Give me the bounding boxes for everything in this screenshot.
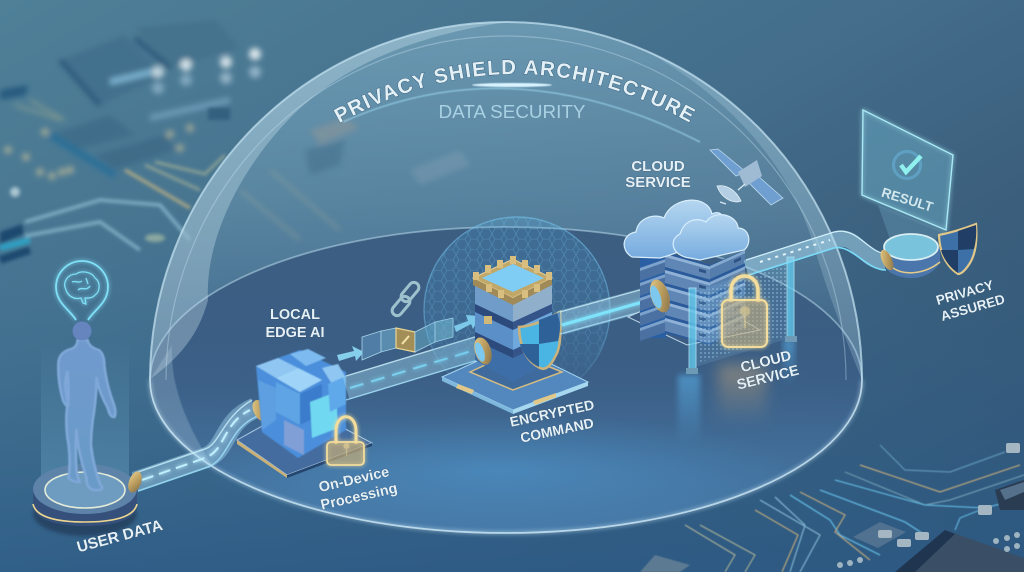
blurred circuit board, top left [0, 20, 261, 180]
label: on-device processing [317, 464, 399, 514]
base rim back [150, 227, 862, 380]
circuit traces, bottom right [640, 443, 1024, 572]
label: encrypted command: ENCRYPTED [508, 396, 596, 430]
local edge AI node [237, 307, 399, 514]
subtitle: DATA SECURITY [438, 101, 586, 122]
label: on-device processing: Processing [319, 481, 399, 514]
arrow into tower [454, 315, 480, 332]
pipe collar [646, 277, 674, 315]
pedestal [33, 464, 137, 536]
encrypted command tower [442, 256, 596, 446]
glass firewall [686, 257, 797, 374]
base plate [628, 290, 760, 345]
cloud service node [624, 149, 888, 394]
circuit traces, left [0, 108, 230, 260]
hologram beam [878, 205, 945, 248]
user data node [33, 261, 165, 556]
icon: shield [519, 312, 560, 369]
dome outline [150, 22, 862, 380]
command pipe collar [471, 335, 495, 367]
icon: cloud padlock [722, 276, 767, 347]
label: encrypted command: COMMAND [519, 415, 595, 446]
icon: brain in circle [56, 261, 108, 320]
person figure [58, 322, 115, 490]
icon: padlock [327, 417, 364, 465]
dome body fill [150, 22, 862, 533]
dome floor [150, 227, 862, 533]
result panel [862, 110, 953, 230]
crenellated top [473, 259, 552, 298]
local edge AI node: EDGE AI [265, 325, 325, 341]
floor glow and reflections [200, 340, 800, 525]
label: privacy assured: PRIVACY [934, 277, 995, 308]
label: privacy assured [934, 277, 1007, 324]
encrypted data blocks [362, 280, 480, 360]
title: PRIVACY SHIELD ARCHITECTURE [333, 60, 696, 123]
label: cloud service top [625, 158, 691, 191]
holographic column [41, 340, 129, 490]
pipe: command to cloud [560, 284, 662, 334]
label: cloud service lower [735, 348, 801, 394]
right glass band [640, 48, 862, 380]
dome crescent highlight [150, 22, 506, 380]
icon: chain link [390, 280, 421, 318]
label: cloud service lower: CLOUD [739, 348, 793, 376]
hexagon globe [423, 216, 610, 378]
pedestal [878, 234, 940, 278]
result panel: RESULT [880, 185, 936, 215]
tower body [475, 285, 552, 382]
pipe: edge to command [346, 336, 478, 400]
reflection in dome [240, 118, 470, 240]
pipe: user to edge [126, 397, 273, 494]
label: privacy assured: ASSURED [939, 291, 1007, 324]
label: cloud service lower: SERVICE [735, 363, 801, 394]
cube cluster [256, 349, 346, 458]
base rim front [150, 380, 862, 533]
glass dome [150, 22, 862, 533]
label: user data: USER DATA [75, 517, 165, 556]
icon: privacy shield [939, 224, 976, 274]
base plate [442, 345, 588, 410]
upper glow arc [343, 88, 700, 142]
lower left glass band [150, 345, 213, 467]
satellite [710, 149, 783, 205]
pipe: cloud to result [746, 231, 888, 276]
clouds [624, 200, 749, 260]
label: cloud service top: SERVICE [625, 174, 691, 191]
label: encrypted command [508, 396, 596, 446]
label: on-device processing: On-Device [317, 464, 391, 496]
server stacks [640, 250, 745, 345]
label: local edge AI: LOCAL [270, 307, 320, 323]
arrow out [337, 346, 364, 361]
base plate [237, 405, 372, 475]
label: cloud service top: CLOUD [631, 158, 685, 175]
result node [862, 110, 1007, 324]
